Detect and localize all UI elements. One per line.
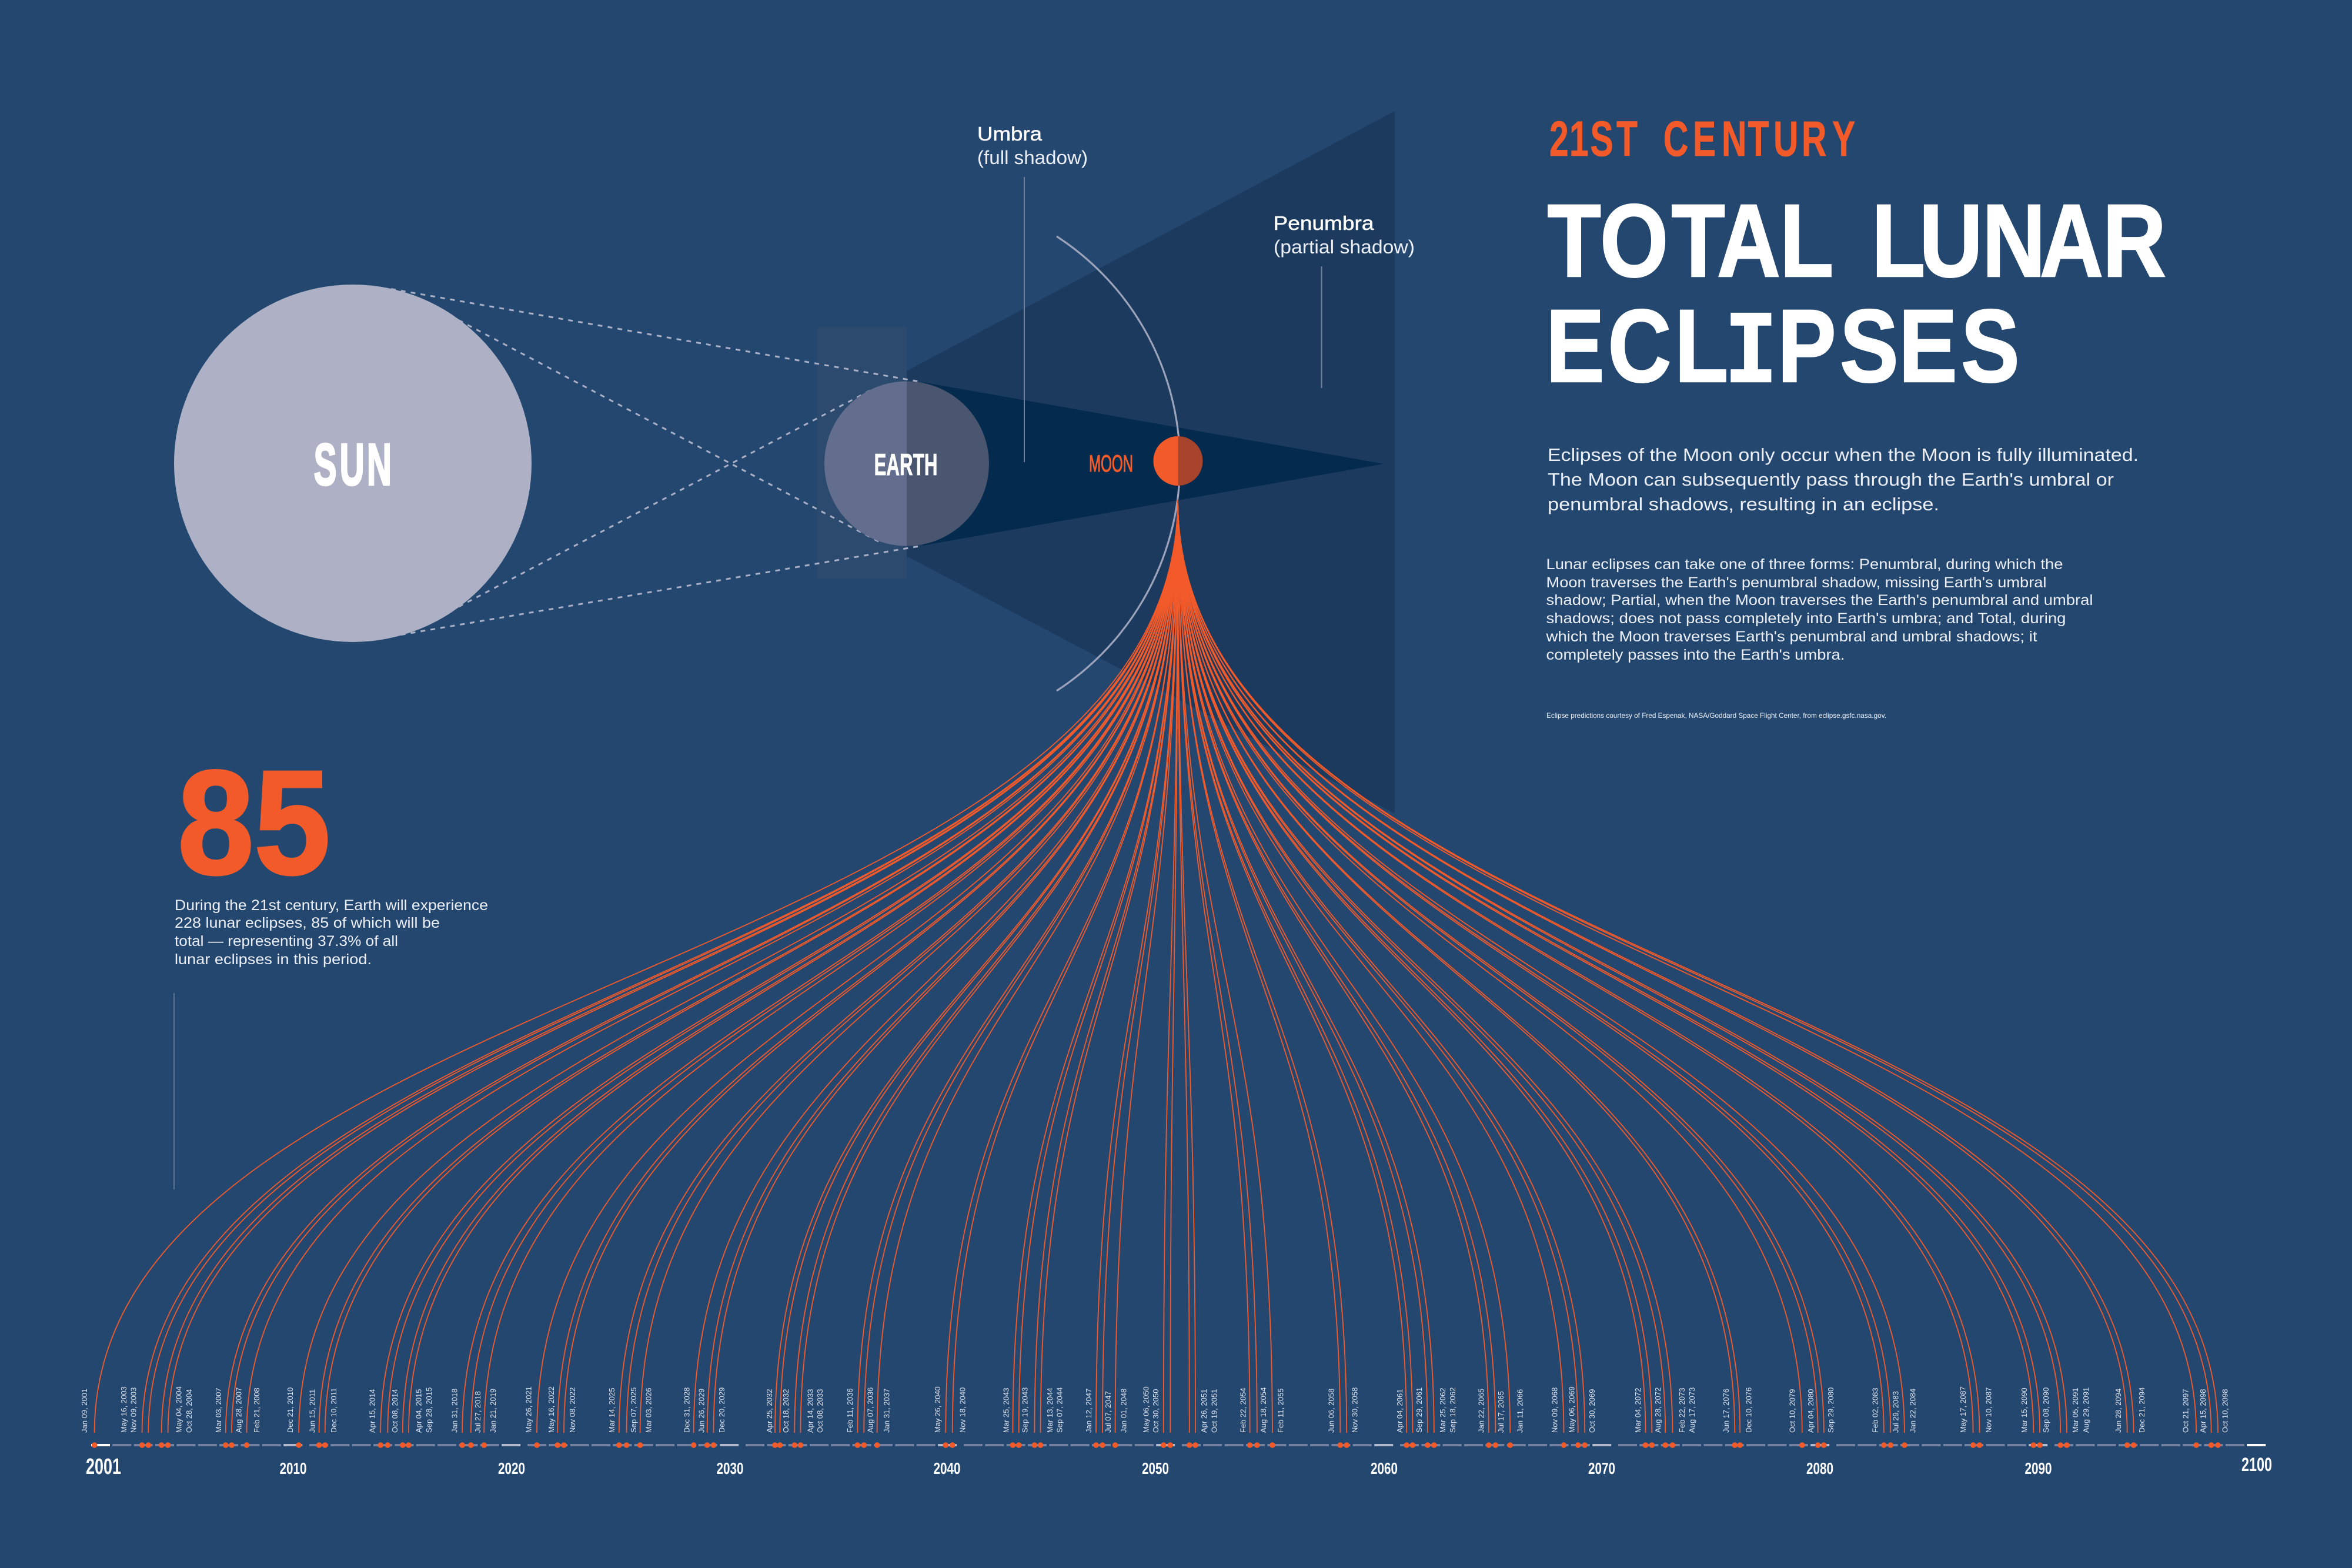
decade year labels: 2040: [934, 1459, 961, 1477]
subtitle: 21st century: 21ST CENTURY: [1549, 112, 1855, 167]
rotated eclipse date labels: Oct 18, 2032: [781, 1389, 790, 1433]
rotated eclipse date labels: Sep 29, 2061: [1415, 1388, 1424, 1433]
moon: [1089, 436, 1203, 486]
statistic paragraph: total — representing 37.3% of all: [175, 933, 398, 950]
decade year labels: 2030: [716, 1459, 743, 1477]
rotated eclipse date labels: Apr 15, 2098: [2199, 1389, 2207, 1433]
statistic paragraph: 228 lunar eclipses, 85 of which will be: [175, 915, 440, 931]
faint rectangle behind earth: [817, 327, 907, 579]
rotated eclipse date labels: Jul 27, 2018: [473, 1391, 482, 1433]
rotated eclipse date labels: Jul 29, 2083: [1892, 1391, 1900, 1433]
rotated eclipse date labels: May 26, 2021: [524, 1386, 533, 1433]
eclipse curves fanning out from the moon: [95, 500, 2218, 1433]
rotated eclipse date labels: Feb 11, 2055: [1276, 1388, 1285, 1433]
rotated eclipse date labels: Mar 05, 2091: [2071, 1388, 2080, 1433]
rotated eclipse date labels: Jan 31, 2018: [450, 1389, 459, 1433]
forms of eclipses paragraph: Lunar eclipses can take one of three forms: Penumbral, during which the: [1546, 556, 2063, 573]
rotated eclipse date labels: May 06, 2069: [1567, 1386, 1576, 1433]
rotated eclipse date labels: Mar 15, 2090: [2020, 1388, 2029, 1433]
rotated eclipse date labels: Sep 28, 2015: [425, 1388, 433, 1433]
umbra pointer line: [1024, 177, 1025, 462]
moon: MOON: [1089, 451, 1133, 477]
eclipse markers on the timeline: [95, 1442, 2218, 1448]
rotated eclipse date labels: Mar 14, 2025: [607, 1388, 616, 1433]
rotated eclipse date labels: Nov 08, 2022: [568, 1388, 577, 1433]
forms of eclipses paragraph: completely passes into the Earth's umbra.: [1546, 647, 1845, 663]
rotated eclipse date labels: Oct 10, 2079: [1788, 1389, 1797, 1433]
rotated eclipse date labels: Sep 19, 2043: [1020, 1388, 1029, 1433]
rotated eclipse date labels: Aug 17, 2073: [1688, 1388, 1696, 1433]
rotated eclipse date labels: Feb 21, 2008: [252, 1388, 261, 1433]
rotated eclipse date labels: Dec 10, 2011: [329, 1388, 338, 1433]
sun: SUN: [314, 432, 392, 498]
dashed light rays from sun to earth: [391, 289, 923, 636]
rotated eclipse date labels: [80, 1386, 2230, 1433]
intro paragraph: penumbral shadows, resulting in an eclipse.: [1548, 494, 1939, 514]
rotated eclipse date labels: Dec 31, 2028: [683, 1388, 691, 1433]
intro paragraph: [1548, 444, 2139, 514]
rotated eclipse date labels: Oct 28, 2004: [185, 1389, 193, 1433]
rotated eclipse date labels: Jun 15, 2011: [308, 1389, 317, 1433]
rotated eclipse date labels: Sep 29, 2080: [1826, 1388, 1835, 1433]
rotated eclipse date labels: Jan 09, 2001: [80, 1389, 89, 1433]
umbra label: Umbra: [977, 123, 1043, 145]
forms of eclipses paragraph: [1545, 556, 2093, 663]
rotated eclipse date labels: Jan 12, 2047: [1084, 1389, 1093, 1433]
intro paragraph: The Moon can subsequently pass through the Earth's umbral or: [1548, 469, 2114, 490]
source credit: Eclipse predictions courtesy of Fred Espenak, NASA/Goddard Space Flight Center, from eclipse.gsfc.nasa.gov.: [1546, 711, 1886, 720]
timeline year dashes: [91, 1444, 2266, 1446]
umbra shadow cone: [923, 382, 1384, 546]
rotated eclipse date labels: Oct 08, 2033: [816, 1389, 824, 1433]
rotated eclipse date labels: Nov 18, 2040: [958, 1388, 967, 1433]
rotated eclipse date labels: Jan 11, 2066: [1515, 1389, 1524, 1433]
rotated eclipse date labels: Nov 09, 2003: [129, 1388, 138, 1433]
forms of eclipses paragraph: Moon traverses the Earth's penumbral shadow, missing Earth's umbral: [1546, 574, 2046, 591]
rotated eclipse date labels: Apr 15, 2014: [368, 1389, 377, 1433]
rotated eclipse date labels: Apr 04, 2061: [1395, 1389, 1404, 1433]
rotated eclipse date labels: Jan 22, 2065: [1477, 1389, 1486, 1433]
decade year labels: 2070: [1588, 1459, 1615, 1477]
rotated eclipse date labels: Feb 22, 2054: [1239, 1388, 1248, 1433]
rotated eclipse date labels: Aug 07, 2036: [866, 1388, 875, 1433]
rotated eclipse date labels: May 17, 2087: [1959, 1386, 1967, 1433]
rotated eclipse date labels: Mar 04, 2072: [1633, 1388, 1642, 1433]
rotated eclipse date labels: Oct 30, 2069: [1588, 1389, 1596, 1433]
rotated eclipse date labels: Dec 10, 2076: [1744, 1388, 1753, 1433]
decade year labels: 2050: [1142, 1459, 1169, 1477]
decade year labels: 2020: [498, 1459, 525, 1477]
decade year labels: 2010: [280, 1459, 307, 1477]
decade year labels: 2090: [2025, 1459, 2052, 1477]
sun: [174, 285, 532, 642]
rotated eclipse date labels: May 06, 2050: [1141, 1386, 1150, 1433]
statistic paragraph: lunar eclipses in this period.: [175, 951, 372, 968]
rotated eclipse date labels: Oct 30, 2050: [1151, 1389, 1160, 1433]
forms of eclipses paragraph: shadows; does not pass completely into Earth's umbra; and Total, during: [1546, 610, 2066, 627]
intro paragraph: Eclipses of the Moon only occur when the Moon is fully illuminated.: [1548, 444, 2139, 465]
rotated eclipse date labels: Apr 25, 2032: [765, 1389, 774, 1433]
rotated eclipse date labels: Mar 03, 2007: [214, 1388, 223, 1433]
rotated eclipse date labels: Apr 04, 2015: [415, 1389, 423, 1433]
rotated eclipse date labels: Mar 25, 2043: [1002, 1388, 1010, 1433]
rotated eclipse date labels: Jan 21, 2019: [489, 1389, 497, 1433]
title: [1546, 183, 2166, 413]
rotated eclipse date labels: Sep 18, 2062: [1448, 1388, 1457, 1433]
decade year labels: 2080: [1806, 1459, 1833, 1477]
forms of eclipses paragraph: which the Moon traverses Earth's penumbral and umbral shadows; it: [1545, 628, 2037, 645]
rotated eclipse date labels: Nov 09, 2068: [1551, 1388, 1559, 1433]
rotated eclipse date labels: Nov 10, 2087: [1984, 1388, 1993, 1433]
rotated eclipse date labels: Apr 14, 2033: [806, 1389, 815, 1433]
decade year labels: 2001: [86, 1455, 121, 1479]
decade year labels: [86, 1454, 2272, 1479]
statistic paragraph: During the 21st century, Earth will experience: [175, 897, 488, 914]
rotated eclipse date labels: Mar 25, 2062: [1438, 1388, 1447, 1433]
vertical rule under statistic: [173, 993, 175, 1189]
penumbra shadow cone: [907, 111, 1395, 814]
rotated eclipse date labels: Oct 08, 2014: [390, 1389, 399, 1433]
earth orbit arc: [1057, 236, 1180, 691]
rotated eclipse date labels: Jan 31, 2037: [883, 1389, 891, 1433]
big number 85: 85: [178, 740, 330, 905]
rotated eclipse date labels: Sep 07, 2044: [1055, 1388, 1064, 1433]
penumbra label: (partial shadow): [1274, 236, 1415, 258]
rotated eclipse date labels: Feb 22, 2073: [1678, 1388, 1686, 1433]
rotated eclipse date labels: Apr 26, 2051: [1200, 1389, 1208, 1433]
rotated eclipse date labels: Jun 26, 2029: [697, 1389, 706, 1433]
rotated eclipse date labels: May 16, 2003: [119, 1386, 128, 1433]
decade year labels: 2060: [1371, 1459, 1398, 1477]
title: ECLIPSES: [1546, 288, 2020, 413]
rotated eclipse date labels: Aug 18, 2054: [1259, 1388, 1268, 1433]
rotated eclipse date labels: Jan 22, 2084: [1908, 1389, 1917, 1433]
decade year labels: 2100: [2241, 1454, 2272, 1475]
rotated eclipse date labels: Jun 17, 2076: [1722, 1389, 1730, 1433]
rotated eclipse date labels: Jul 17, 2065: [1496, 1391, 1505, 1433]
rotated eclipse date labels: Aug 28, 2072: [1653, 1388, 1662, 1433]
rotated eclipse date labels: Oct 19, 2051: [1210, 1389, 1218, 1433]
rotated eclipse date labels: Mar 13, 2044: [1045, 1388, 1054, 1433]
rotated eclipse date labels: Jan 01, 2048: [1120, 1389, 1128, 1433]
rotated eclipse date labels: Jul 07, 2047: [1104, 1391, 1112, 1433]
rotated eclipse date labels: May 26, 2040: [933, 1386, 942, 1433]
penumbra label: Penumbra: [1274, 212, 1374, 234]
rotated eclipse date labels: Mar 03, 2026: [644, 1388, 653, 1433]
rotated eclipse date labels: Sep 08, 2090: [2042, 1388, 2050, 1433]
statistic paragraph: [175, 897, 488, 968]
rotated eclipse date labels: May 16, 2022: [547, 1386, 556, 1433]
rotated eclipse date labels: Oct 10, 2098: [2221, 1389, 2230, 1433]
rotated eclipse date labels: Sep 07, 2025: [629, 1388, 638, 1433]
rotated eclipse date labels: Feb 11, 2036: [846, 1388, 854, 1433]
title: TOTAL LUNAR: [1548, 183, 2166, 299]
rotated eclipse date labels: Aug 28, 2007: [235, 1388, 243, 1433]
rotated eclipse date labels: Jun 06, 2058: [1327, 1389, 1336, 1433]
earth: [824, 382, 989, 546]
rotated eclipse date labels: Dec 21, 2010: [286, 1388, 295, 1433]
rotated eclipse date labels: Dec 20, 2029: [717, 1388, 726, 1433]
forms of eclipses paragraph: shadow; Partial, when the Moon traverses the Earth's penumbral and umbral: [1546, 592, 2093, 609]
rotated eclipse date labels: Apr 04, 2080: [1806, 1389, 1815, 1433]
rotated eclipse date labels: Aug 29, 2091: [2082, 1388, 2090, 1433]
rotated eclipse date labels: May 04, 2004: [175, 1386, 183, 1433]
rotated eclipse date labels: Feb 02, 2083: [1871, 1388, 1880, 1433]
earth: EARTH: [874, 448, 937, 482]
rotated eclipse date labels: Jun 28, 2094: [2114, 1389, 2123, 1433]
rotated eclipse date labels: Dec 21, 2094: [2137, 1388, 2146, 1433]
penumbra label: [1274, 212, 1415, 258]
umbra label: (full shadow): [977, 147, 1088, 168]
umbra label: [977, 123, 1088, 168]
rotated eclipse date labels: Oct 21, 2097: [2181, 1389, 2190, 1433]
rotated eclipse date labels: Nov 30, 2058: [1351, 1388, 1359, 1433]
penumbra pointer line: [1321, 266, 1322, 388]
